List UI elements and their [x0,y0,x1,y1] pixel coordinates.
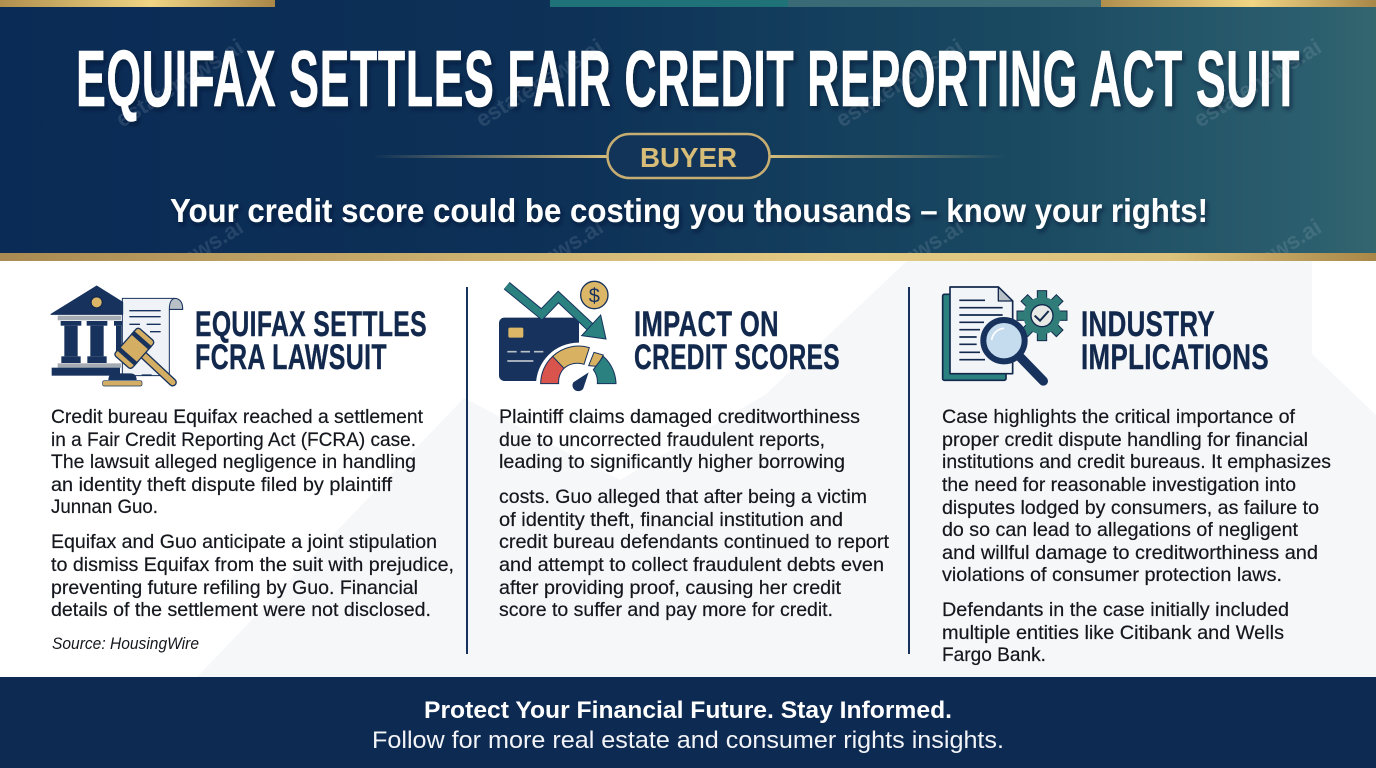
paragraph 2: of identity theft, financial institution and [499,509,843,531]
heading: EQUIFAX SETTLES [195,305,427,344]
watermarks: estatenews.ai [831,33,968,132]
paragraph 2 [51,531,454,621]
heading: CREDIT SCORES [634,338,840,377]
paragraph 1 [51,406,424,518]
heading [195,305,427,377]
heading: IMPLICATIONS [1081,338,1269,377]
page background [0,261,1376,677]
heading: FCRA LAWSUIT [195,338,387,377]
paragraph 1: leading to significantly higher borrowing [499,451,845,473]
icon: falling arrow, card and credit gauge [499,281,621,391]
watermarks: estatenews.ai [471,213,608,312]
paragraph 2: and attempt to collect fraudulent debts even [499,554,884,576]
panel: Equifax settles FCRA lawsuit [51,286,454,653]
gold divider band [0,253,1376,261]
footer [0,677,1376,768]
icon: courthouse, scroll and gavel [51,286,183,386]
heading: INDUSTRY [1081,305,1215,344]
paragraph 2: to dismiss Equifax from the suit with prejudice, [51,554,454,576]
column divider [908,287,910,654]
paragraph 2: preventing future refiling by Guo. Financial [51,577,418,599]
right ornament line [770,155,1006,158]
header banner [0,0,1376,253]
paragraph 1: an identity theft dispute filed by plaintiff [51,474,393,496]
paragraph 2: Equifax and Guo anticipate a joint stipulation [51,531,437,553]
top accent strip: teal [550,0,788,7]
subtitle: Your credit score could be costing you thousands – know your rights! [170,192,1208,229]
icon: falling arrow, card and credit gauge: $ [589,285,600,307]
paragraph 2: Fargo Bank. [942,644,1046,666]
watermarks: estatenews.ai [111,213,248,312]
paragraph 1: in a Fair Credit Reporting Act (FCRA) case. [51,429,416,451]
watermarks: estatenews.ai [831,213,968,312]
watermarks: estatenews.ai [111,33,248,132]
paragraph 1: institutions and credit bureaus. It emphasizes [942,451,1331,473]
source: Source: HousingWire [52,635,199,653]
paragraph 1: due to uncorrected fraudulent reports, [499,429,825,451]
footer call to action: Follow for more real estate and consumer rights insights. [372,727,1004,754]
top accent strip: right gold [1101,0,1376,7]
watermarks: estatenews.ai [471,33,608,132]
column divider [466,287,468,654]
top accent strip: left gold [0,0,275,7]
paragraph 2: Defendants in the case initially included [942,599,1289,621]
paragraph 1 [499,406,860,473]
paragraph 2: score to suffer and pay more for credit. [499,599,833,621]
paragraph 2 [499,486,890,621]
paragraph 2: after providing proof, causing her credit [499,577,842,599]
paragraph 1 [942,406,1331,586]
paragraph 2: costs. Guo alleged that after being a victim [499,486,867,508]
left ornament line [372,155,608,158]
paragraph 2 [942,599,1289,666]
footer headline: Protect Your Financial Future. Stay Informed. [424,697,952,724]
paragraph 1: Credit bureau Equifax reached a settlement [51,406,424,428]
icon: documents, gear and magnifier [943,287,1067,381]
paragraph 1: the need for reasonable investigation into [942,474,1296,496]
top accent strip: muted teal [788,0,1101,7]
paragraph 1: Junnan Guo. [51,496,158,518]
paragraph 2: multiple entities like Citibank and Wells [942,622,1284,644]
paragraph 1: do so can lead to allegations of negligent [942,519,1299,541]
panel: impact on credit scores [499,281,890,621]
audience badge: BUYER [640,142,737,173]
panel: industry implications [942,287,1331,666]
heading [634,305,840,377]
paragraph 1: Plaintiff claims damaged creditworthiness [499,406,860,428]
watermarks: estatenews.ai [1189,213,1326,312]
watermarks [118,38,1322,253]
paragraph 1: and willful damage to creditworthiness and [942,542,1318,564]
paragraph 2: details of the settlement were not disclosed. [51,599,431,621]
heading: IMPACT ON [634,305,779,344]
watermarks: estatenews.ai [1189,33,1326,132]
paragraph 1: proper credit dispute handling for financial [942,429,1308,451]
paragraph 1: Case highlights the critical importance of [942,406,1296,428]
paragraph 1: disputes lodged by consumers, as failure to [942,497,1319,519]
paragraph 1: violations of consumer protection laws. [942,564,1282,586]
paragraph 2: credit bureau defendants continued to report [499,531,890,553]
paragraph 1: The lawsuit alleged negligence in handling [51,451,416,473]
audience badge [608,134,770,178]
heading [1081,305,1269,377]
